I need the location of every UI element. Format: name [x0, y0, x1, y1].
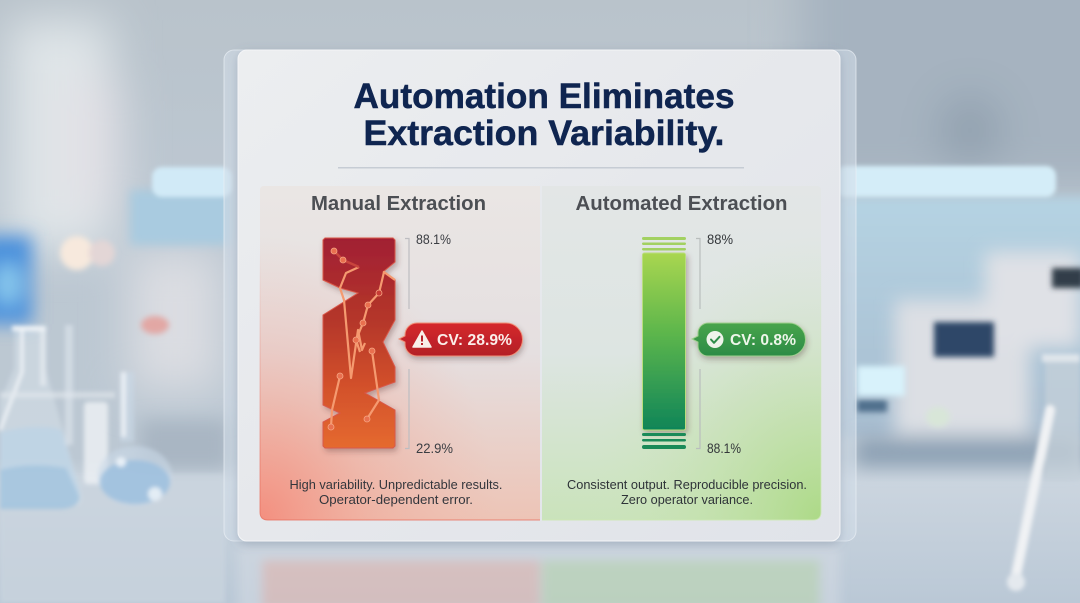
main card — [238, 50, 840, 541]
title: Extraction Variability. — [364, 113, 724, 153]
label: 88%: 88% — [707, 232, 733, 247]
callout: CV 0.8%: CV: 0.8% — [730, 332, 796, 349]
icon: blurred glassware right — [1007, 354, 1080, 591]
chart: jagged variability bar — [323, 238, 395, 448]
icon: blurred round flask — [98, 372, 172, 506]
title: Automation Eliminates — [354, 76, 734, 116]
callout: CV 28.9% — [399, 323, 522, 356]
caption: automated extraction — [567, 477, 807, 507]
chart: consistent output bar — [642, 237, 686, 449]
panel: manual extraction — [260, 186, 540, 520]
icon: check badge — [706, 331, 724, 348]
label: 88.1%: 88.1% — [416, 232, 451, 247]
card reflection — [238, 544, 840, 603]
heading: manual extraction: Manual Extraction — [311, 193, 486, 215]
callout: CV 0.8% — [692, 323, 806, 356]
panel: automated extraction — [542, 186, 821, 520]
scale bracket — [405, 238, 409, 448]
title — [354, 76, 734, 153]
icon: blurred conical flask — [0, 325, 115, 509]
caption: manual extraction: Operator-dependent error. — [319, 492, 473, 507]
glass backing panel — [224, 50, 856, 541]
caption: manual extraction: High variability. Unpredictable results. — [290, 477, 502, 492]
caption: manual extraction — [290, 477, 502, 507]
label: 88.1%: 88.1% — [707, 441, 741, 456]
icon: warning triangle — [413, 331, 431, 347]
label: 22.9%: 22.9% — [416, 441, 453, 456]
callout: CV 28.9%: CV: 28.9% — [437, 332, 512, 349]
scale bracket — [696, 238, 700, 448]
caption: automated extraction: Consistent output. Reproducible precision. — [567, 477, 807, 492]
caption: automated extraction: Zero operator variance. — [621, 492, 753, 507]
heading: automated extraction: Automated Extraction — [576, 193, 788, 215]
